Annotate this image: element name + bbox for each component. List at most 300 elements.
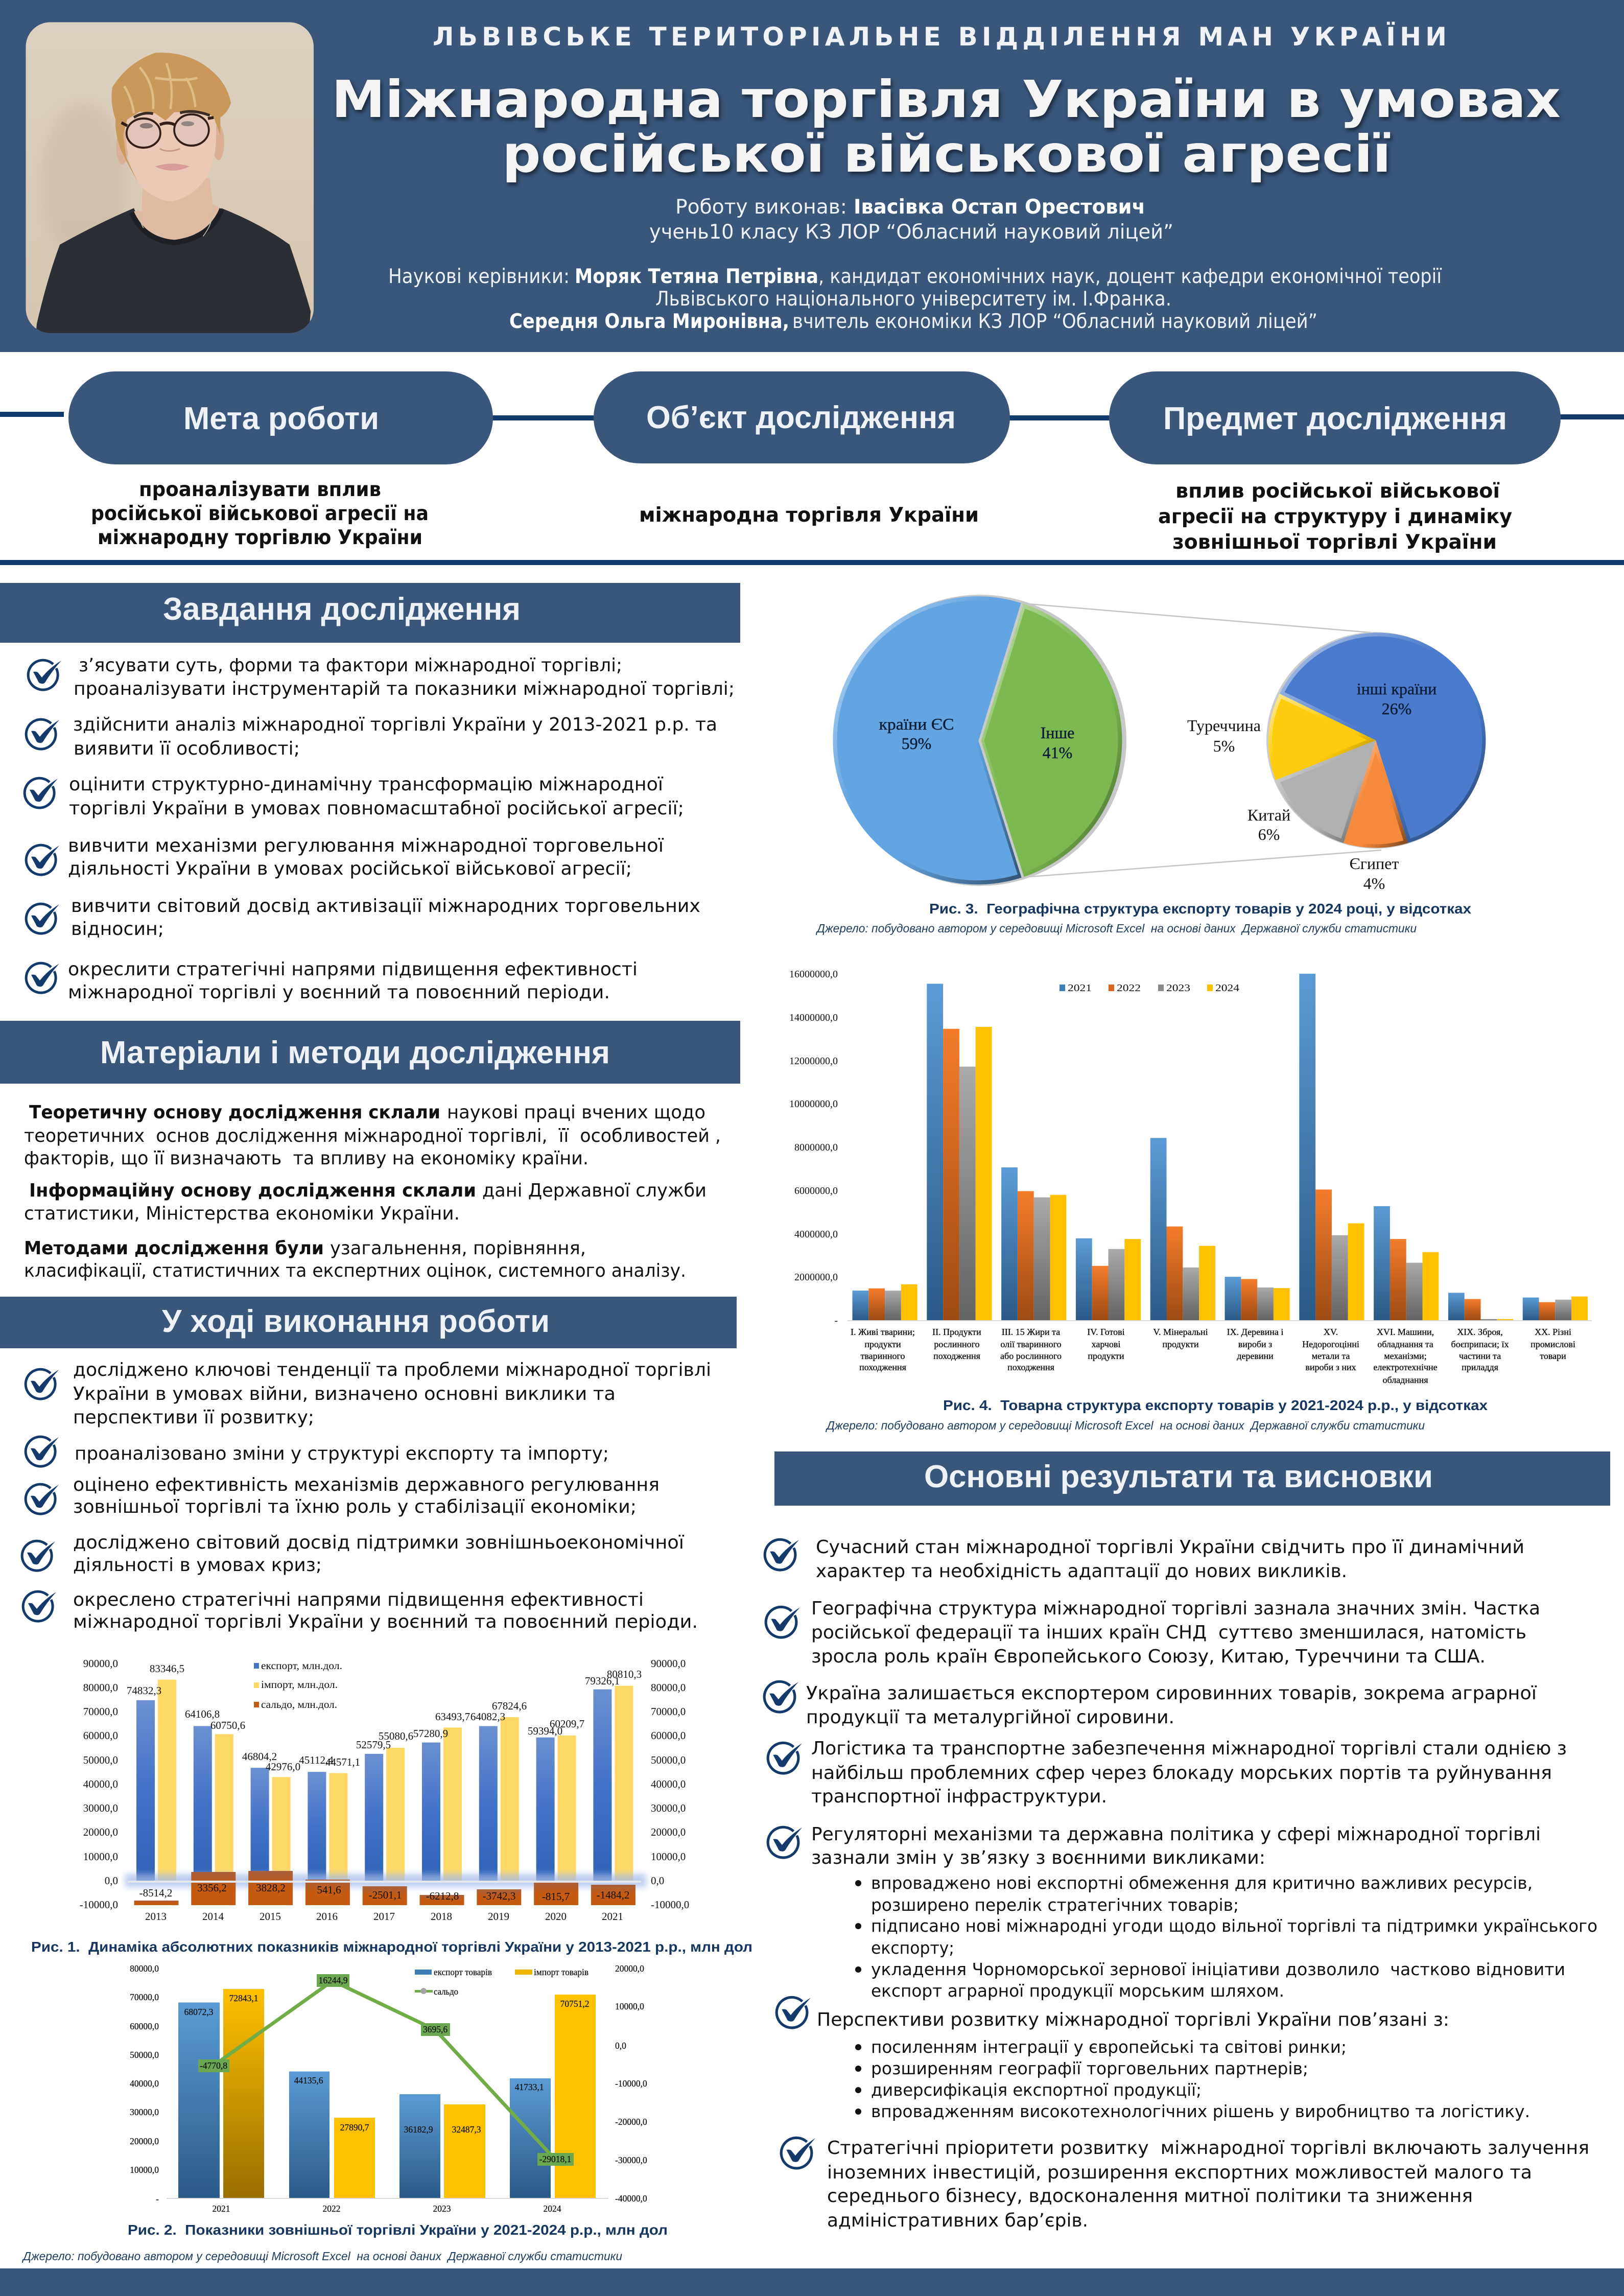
legend: імпорт, млн.дол. (261, 1678, 338, 1691)
left axis: 30000,0 (83, 1802, 118, 1814)
bar value labels: 36182,9 (404, 2124, 433, 2135)
right axis: 70000,0 (651, 1705, 686, 1718)
secondary pie labels: 5% (1213, 737, 1235, 755)
conclusion 4 (768, 1738, 1567, 1807)
right axis: -10000,0 (651, 1899, 689, 1911)
left axis: 40000,0 (130, 2078, 159, 2089)
left axis: 50000,0 (130, 2050, 159, 2060)
divider (0, 560, 1624, 565)
value labels: 67824,6 (492, 1700, 527, 1712)
value labels: 80810,3 (607, 1668, 642, 1680)
conclusion 7 (781, 2138, 1589, 2231)
bar value labels: 68072,3 (184, 2007, 214, 2017)
header band (0, 0, 1624, 352)
list: prospects: посиленням інтеграції у європейські та світові ринки; (871, 2037, 1347, 2057)
pill: subject (1109, 371, 1561, 464)
heading: results and conclusions (774, 1451, 1610, 1506)
years: 2023 (433, 2204, 451, 2214)
source note: figure 3: Джерело: побудовано автором у середовищі Microsoft Excel на основі даних Державної служби статистики (815, 922, 1417, 935)
progress 5: окреслено стратегічні напрями підвищення ефективності (73, 1589, 644, 1610)
right axis: 40000,0 (651, 1778, 686, 1790)
balance bars (134, 1871, 636, 1905)
conclusion 7: адміністративних бар’єрів. (827, 2210, 1088, 2231)
legend (1060, 982, 1239, 994)
conclusion 7: середнього бізнесу, вдосконалення митної політики та зниження (827, 2186, 1473, 2207)
value labels: 60750,6 (210, 1719, 245, 1731)
bar value labels: 27890,7 (340, 2122, 369, 2133)
paragraph: information basis: статистики, Міністерства економіки України. (24, 1203, 460, 1224)
category labels: XV. (1324, 1327, 1338, 1337)
conclusion 6 (776, 1997, 1530, 2121)
category labels: походження (859, 1362, 906, 1372)
left axis: 0,0 (105, 1875, 118, 1887)
author block: Роботу виконав: (675, 196, 847, 219)
list: regulatory changes: експорту; (871, 1938, 954, 1958)
category labels: товари (1540, 1351, 1566, 1361)
right axis: -10000,0 (615, 2078, 647, 2089)
category labels: або рослинного (1000, 1351, 1062, 1361)
value labels: -2501,1 (369, 1889, 402, 1901)
conclusion 5: зазнали змін у зв’язку з воєнними викликами: (811, 1847, 1265, 1868)
category labels: олії тваринного (1000, 1339, 1062, 1349)
secondary pie (1266, 632, 1486, 849)
paragraph: methods (24, 1238, 686, 1281)
axis baseline (167, 2198, 608, 2199)
category labels: боєприпаси; їх (1451, 1339, 1509, 1349)
y axis: - (834, 1315, 838, 1326)
paragraph: theoretical basis: наукові праці вчених щодо (447, 1102, 705, 1123)
list: regulatory changes (855, 1873, 1597, 2001)
y axis: 10000000,0 (789, 1098, 838, 1110)
conclusion 4: найбільш проблемних сфер через блокаду морських портів та руйнування (811, 1763, 1552, 1784)
subject text (1158, 480, 1512, 554)
legend: 2024 (1215, 982, 1239, 994)
secondary pie labels: Китай (1248, 806, 1290, 824)
y axis (789, 969, 838, 1326)
list: prospects (855, 2037, 1530, 2121)
main pie labels (879, 715, 1074, 762)
supervisors block: Наукові керівники: (388, 265, 570, 288)
secondary pie labels: 26% (1382, 699, 1411, 718)
conclusion 4: Логістика та транспортне забезпечення міжнародної торгівлі стали однією з (811, 1738, 1567, 1759)
value labels: 541,6 (317, 1884, 341, 1896)
value labels: 55080,6 (379, 1730, 413, 1742)
main pie labels: країни ЄС (879, 715, 954, 733)
supervisors block: Львівського національного університету ім. І.Франка. (655, 288, 1171, 311)
conclusion 3: Україна залишається експортером сировинних товарів, зокрема аграрної (806, 1683, 1537, 1704)
task 6 (26, 959, 638, 1003)
value labels: 42976,0 (266, 1761, 300, 1773)
value labels: 44571,1 (325, 1756, 360, 1768)
organisation name: ЛЬВІВСЬКЕ ТЕРИТОРІАЛЬНЕ ВІДДІЛЕННЯ МАН УКРАЇНИ (433, 22, 1447, 52)
bar value labels: 44135,6 (294, 2075, 323, 2086)
value labels: 79326,1 (585, 1675, 620, 1687)
balance labels: -4770,8 (200, 2060, 227, 2071)
conclusion 5 (768, 1824, 1597, 2001)
years: 2013 (145, 1910, 167, 1923)
heading: tasks: Завдання дослідження (163, 592, 521, 627)
paragraph: theoretical basis (24, 1102, 721, 1169)
left axis: 80000,0 (130, 1963, 159, 1974)
task 1: з’ясувати суть, форми та фактори міжнародної торгівлі; (79, 655, 622, 676)
supervisors block (388, 265, 1442, 333)
object text: міжнародна торгівля України (639, 504, 979, 527)
value labels: -8514,2 (139, 1887, 172, 1899)
right axis: 20000,0 (615, 1963, 644, 1974)
right axis: 90000,0 (651, 1657, 686, 1670)
panel: materials and methods (0, 1021, 740, 1281)
category labels: продукти (864, 1339, 901, 1349)
legend: імпорт товарів (534, 1967, 589, 1977)
left axis: 70000,0 (130, 1992, 159, 2002)
heading: work progress: У ході виконання роботи (162, 1304, 550, 1339)
axis baseline (848, 1320, 1592, 1321)
goal text: російської військової агресії на (91, 502, 429, 525)
legend: експорт, млн.дол. (261, 1659, 342, 1672)
years: 2014 (202, 1910, 224, 1923)
conclusion 4: транспортної інфраструктури. (811, 1786, 1107, 1807)
footer band (0, 2268, 1624, 2296)
panel: work progress (0, 1297, 737, 1632)
y axis: 8000000,0 (794, 1142, 838, 1153)
y axis: 2000000,0 (794, 1272, 838, 1283)
legend: 2021 (1068, 982, 1092, 994)
value labels: 52579,5 (356, 1739, 391, 1751)
category labels: продукти (1162, 1339, 1199, 1349)
right axis: 30000,0 (651, 1802, 686, 1814)
task 6: окреслити стратегічні напрями підвищення ефективності (68, 959, 638, 980)
chart: figure 3 geographic structure pie of pie (833, 595, 1486, 893)
value labels: 83346,5 (150, 1662, 184, 1675)
conclusion 7: Стратегічні пріоритети розвитку міжнародної торгівлі включають залучення (827, 2138, 1589, 2159)
left axis: 60000,0 (130, 2021, 159, 2031)
chart: figure 1 trade dynamics 2013-2021 (80, 1657, 689, 1923)
category labels: приладдя (1462, 1362, 1498, 1372)
left axis: 20000,0 (83, 1826, 118, 1838)
right axis: -20000,0 (615, 2117, 647, 2127)
years: 2019 (488, 1910, 509, 1923)
category labels: IV. Готові (1087, 1327, 1125, 1337)
balance labels (198, 1974, 574, 2166)
import bars (158, 1680, 633, 1881)
right axis (651, 1657, 689, 1911)
value labels: 57280,9 (413, 1727, 448, 1740)
category labels: вироби з них (1305, 1362, 1356, 1372)
legend: експорт товарів (434, 1967, 492, 1977)
category labels: V. Мінеральні (1153, 1327, 1208, 1337)
paragraph: methods: класифікації, статистичних та експертних оцінок, системного аналізу. (24, 1260, 686, 1281)
value labels: 63493,7 (435, 1711, 470, 1723)
conclusion 1: характер та необхідність адаптації до нових викликів. (816, 1561, 1347, 1582)
value labels: 3356,2 (197, 1882, 227, 1894)
task 2: здійснити аналіз міжнародної торгівлі України у 2013-2021 р.р. та (73, 714, 717, 735)
connector line between pills (0, 412, 1624, 420)
conclusion 5: Регуляторні механізми та державна політика у сфері міжнародної торгівлі (811, 1824, 1541, 1845)
legend: сальдо (434, 1986, 458, 1997)
pill: subject: Предмет дослідження (1163, 401, 1507, 436)
supervisors block: , кандидат економічних наук, доцент кафедри економічної теорії (818, 265, 1442, 288)
category labels: рослинного (934, 1339, 980, 1349)
goal text (91, 478, 429, 549)
y axis: 12000000,0 (789, 1056, 838, 1067)
caption: figure 3: Рис. 3. Географічна структура експорту товарів у 2024 році, у відсотках (929, 901, 1471, 917)
value labels: 64082,3 (470, 1711, 505, 1723)
left axis: -10000,0 (80, 1899, 118, 1911)
category labels (851, 1327, 1575, 1385)
value labels: 74832,3 (127, 1684, 161, 1697)
task 4: діяльності України в умовах російської військової агресії; (68, 858, 632, 879)
subject text: зовнішньої торгівлі України (1172, 531, 1497, 554)
left axis: 80000,0 (83, 1681, 118, 1694)
years: 2016 (316, 1910, 338, 1923)
years: 2022 (323, 2204, 340, 2214)
category labels: харчові (1092, 1339, 1120, 1349)
y axis: 16000000,0 (789, 969, 838, 980)
category labels: тваринного (861, 1351, 905, 1361)
legend: сальдо, млн.дол. (261, 1698, 337, 1711)
value labels: -1484,2 (597, 1889, 629, 1901)
category labels: метали та (1312, 1351, 1350, 1361)
years: 2024 (544, 2204, 561, 2214)
progress 4 (22, 1532, 685, 1576)
left axis (130, 1963, 159, 2204)
progress 1: перспективи її розвитку; (73, 1407, 314, 1428)
value labels: 60209,7 (550, 1718, 584, 1730)
category labels: Недорогоцінні (1302, 1339, 1359, 1349)
progress 5 (23, 1589, 698, 1632)
value labels: -6212,8 (426, 1890, 459, 1902)
years: 2021 (602, 1910, 623, 1923)
secondary pie labels (1187, 680, 1437, 893)
task 5: відносин; (71, 919, 164, 940)
photo of the author (25, 20, 316, 335)
list: prospects: впровадженням високотехнологічних рішень у виробництво та логістику. (871, 2101, 1530, 2121)
list: prospects: розширенням географії торговельних партнерів; (871, 2058, 1308, 2078)
title: російської військової агресії (502, 124, 1391, 184)
task 1 (28, 655, 735, 699)
bar value labels: 32487,3 (452, 2124, 481, 2135)
conclusion 1 (765, 1537, 1524, 1582)
export bars (136, 1690, 611, 1881)
supervisors block: Середня Ольга Миронівна, (509, 310, 789, 333)
legend (415, 1967, 589, 1997)
bar value labels (184, 1993, 589, 2135)
task 4: вивчити механізми регулювання міжнародної торговельної (68, 835, 664, 856)
value labels (127, 1662, 642, 1903)
paragraph: theoretical basis: теоретичних основ дослідження міжнародної торгівлі, її особливостей , (24, 1126, 721, 1146)
conclusion 3: продукції та металургійної сировини. (806, 1707, 1174, 1728)
progress 4: діяльності в умовах криз; (73, 1555, 322, 1576)
caption: figure 1: Рис. 1. Динаміка абсолютних показників міжнародної торгівлі України у 2013-2021 р.р., млн дол (31, 1939, 752, 1955)
list: regulatory changes: експорт аграрної продукції морським шляхом. (871, 1981, 1284, 2001)
conclusion 7: іноземних інвестицій, розширення експортних можливостей малого та (827, 2162, 1532, 2183)
category labels: вироби з (1238, 1339, 1272, 1349)
panel: results and conclusions (764, 1451, 1610, 2231)
category labels: промислові (1531, 1339, 1575, 1349)
progress 3: оцінено ефективність механізмів державного регулювання (73, 1474, 660, 1495)
value labels: 64106,8 (185, 1708, 220, 1720)
category labels: II. Продукти (932, 1327, 981, 1337)
category labels: III. 15 Жири та (1002, 1327, 1060, 1337)
years: 2017 (373, 1910, 395, 1923)
2024 bars (901, 1027, 1588, 1320)
heading: materials and methods (0, 1021, 740, 1084)
category labels: походження (1007, 1362, 1054, 1372)
left axis: 20000,0 (130, 2136, 159, 2146)
author block: Івасівка Остап Орестович (854, 196, 1145, 219)
zero line glow (125, 1874, 646, 1887)
years: 2021 (213, 2204, 230, 2214)
legend: 2023 (1166, 982, 1190, 994)
right axis: -30000,0 (615, 2155, 647, 2165)
bar value labels: 41733,1 (515, 2082, 544, 2092)
right axis (615, 1963, 647, 2204)
task 2 (26, 714, 717, 759)
paragraph: methods: Методами дослідження були (24, 1238, 324, 1259)
task 1: проаналізувати інструментарій та показники міжнародної торгівлі; (74, 678, 735, 699)
left axis: 70000,0 (83, 1705, 118, 1718)
years: 2020 (545, 1910, 567, 1923)
y axis: 6000000,0 (794, 1185, 838, 1197)
progress 1 (26, 1360, 711, 1428)
2023 bars (885, 1067, 1571, 1320)
list: regulatory changes: впроваджено нові експортні обмеження для критично важливих ресурсів, (871, 1873, 1533, 1893)
y axis: 14000000,0 (789, 1012, 838, 1023)
conclusion 3 (764, 1681, 1537, 1728)
right axis: 50000,0 (651, 1754, 686, 1766)
main pie labels: 59% (902, 734, 931, 753)
left axis: - (156, 2194, 159, 2204)
right axis: 20000,0 (651, 1826, 686, 1838)
legend (254, 1659, 342, 1711)
legend: 2022 (1117, 982, 1141, 994)
value labels: 45112,4 (299, 1754, 334, 1766)
right axis: 0,0 (651, 1875, 664, 1887)
balance line (214, 1981, 555, 2160)
category labels: продукти (1088, 1351, 1124, 1361)
supervisors block: Моряк Тетяна Петрівна (575, 265, 818, 288)
secondary pie labels: Єгипет (1350, 854, 1399, 873)
years: 2018 (431, 1910, 452, 1923)
secondary pie labels: 4% (1363, 874, 1385, 893)
category labels: IX. Деревина і (1227, 1327, 1283, 1337)
export bars (178, 2003, 551, 2198)
conclusion 2 (766, 1598, 1540, 1667)
conclusion 1: Сучасний стан міжнародної торгівлі України свідчить про її динамічний (816, 1537, 1524, 1558)
task 3: оцінити структурно-динамічну трансформацію міжнародної (69, 774, 664, 795)
main pie (833, 595, 1126, 886)
progress 2: проаналізовано зміни у структурі експорту та імпорту; (75, 1443, 609, 1464)
chart: figure 2 foreign trade 2021-2024 (130, 1963, 647, 2214)
years (145, 1910, 623, 1923)
category labels: обладнання (1382, 1375, 1428, 1385)
source note: figures 1 and 2: Джерело: побудовано автором у середовищі Microsoft Excel на основі даних Державної служби статистики (21, 2250, 622, 2263)
pill: object (594, 371, 1010, 463)
left axis: 90000,0 (83, 1657, 118, 1670)
category labels: I. Живі тварини; (851, 1327, 915, 1337)
progress 3: зовнішньої торгівлі та їхню роль у стабілізації економіки; (73, 1496, 637, 1517)
heading: work progress (0, 1297, 737, 1348)
paragraph: information basis: дані Державної служби (482, 1180, 707, 1201)
progress 4: досліджено світовий досвід підтримки зовнішньоекономічної (73, 1532, 685, 1553)
progress 3 (26, 1474, 660, 1517)
category labels: походження (933, 1351, 980, 1361)
years: 2015 (260, 1910, 281, 1923)
left axis: 10000,0 (83, 1850, 118, 1863)
2021 bars (852, 974, 1539, 1320)
right axis: 10000,0 (615, 2001, 644, 2011)
category labels: частини та (1459, 1351, 1501, 1361)
task 3 (25, 774, 684, 819)
paragraph: information basis (24, 1180, 707, 1224)
conclusion 2: зросла роль країн Європейського Союзу, Китаю, Туреччини та США. (811, 1646, 1486, 1667)
caption: figure 2: Рис. 2. Показники зовнішньої торгівлі України у 2021-2024 р.р., млн дол (128, 2222, 668, 2238)
caption: figure 4: Рис. 4. Товарна структура експорту товарів у 2021-2024 р.р., у відсотках (943, 1397, 1488, 1413)
conclusion 2: російської федерації та інших країн СНД суттєво зменшилася, натомість (811, 1622, 1526, 1643)
secondary pie labels: інші країни (1357, 680, 1437, 698)
right axis: 0,0 (615, 2041, 626, 2051)
right axis: 10000,0 (651, 1850, 686, 1863)
secondary pie labels: Туреччина (1187, 716, 1261, 735)
task 5 (26, 896, 700, 940)
progress 1: України в умовах війни, визначено основні виклики та (73, 1384, 616, 1404)
heading: materials and methods: Матеріали і методи дослідження (100, 1035, 610, 1070)
paragraph: information basis: Інформаційну основу дослідження склали (29, 1180, 476, 1201)
title (332, 69, 1561, 184)
left axis: 50000,0 (83, 1754, 118, 1766)
value labels: -3742,3 (483, 1890, 515, 1902)
source note: figure 4: Джерело: побудовано автором у середовищі Microsoft Excel на основі даних Державної служби статистики (825, 1419, 1425, 1432)
task 4 (26, 835, 664, 879)
category labels: обладнання та (1377, 1339, 1433, 1349)
pill: goal (68, 371, 493, 464)
left axis: 30000,0 (130, 2107, 159, 2117)
left axis: 40000,0 (83, 1778, 118, 1790)
author block (649, 196, 1173, 244)
progress 1: досліджено ключові тенденції та проблеми міжнародної торгівлі (73, 1360, 711, 1380)
title: Міжнародна торгівля України в умовах (332, 69, 1561, 129)
paragraph: methods: узагальнення, порівняння, (330, 1238, 586, 1259)
task 5: вивчити світовий досвід активізації міжнародних торговельних (71, 896, 700, 917)
list: regulatory changes: розширено перелік стратегічних товарів; (871, 1895, 1239, 1915)
list: regulatory changes: підписано нові міжнародні угоди щодо вільної торгівлі та підтримки українського (871, 1916, 1597, 1936)
value labels: 59394,0 (528, 1725, 562, 1737)
task 3: торгівлі України в умовах повномасштабної російської агресії; (69, 798, 684, 819)
author block: учень10 класу КЗ ЛОР “Обласний науковий ліцей” (649, 221, 1173, 244)
balance labels: 16244,9 (319, 1975, 348, 1985)
right axis: 80000,0 (651, 1681, 686, 1694)
right axis: -40000,0 (615, 2193, 647, 2204)
main pie labels: 41% (1043, 743, 1072, 762)
subject text: агресії на структуру і динаміку (1158, 505, 1512, 528)
conclusion 2: Географічна структура міжнародної торгівлі зазнала значних змін. Частка (811, 1598, 1540, 1619)
bar value labels: 72843,1 (229, 1993, 258, 2003)
bar value labels: 70751,2 (560, 1999, 589, 2009)
subject text: вплив російської військової (1175, 480, 1500, 503)
paragraph: theoretical basis: Теоретичну основу дослідження склали (29, 1102, 440, 1123)
conclusion 6: Перспективи розвитку міжнародної торгівлі України пов’язані з: (817, 2009, 1449, 2030)
main pie labels: Інше (1041, 723, 1074, 742)
left axis: 60000,0 (83, 1729, 118, 1742)
connector lines (1022, 603, 1381, 877)
left axis (80, 1657, 118, 1911)
heading: tasks (0, 583, 740, 643)
value labels: -815,7 (542, 1890, 570, 1903)
secondary pie labels: 6% (1258, 825, 1280, 844)
left axis: 10000,0 (130, 2165, 159, 2175)
category labels: механізми; (1384, 1351, 1427, 1361)
task 6: міжнародної торгівлі у воєнний та повоєнний періоди. (68, 982, 610, 1003)
